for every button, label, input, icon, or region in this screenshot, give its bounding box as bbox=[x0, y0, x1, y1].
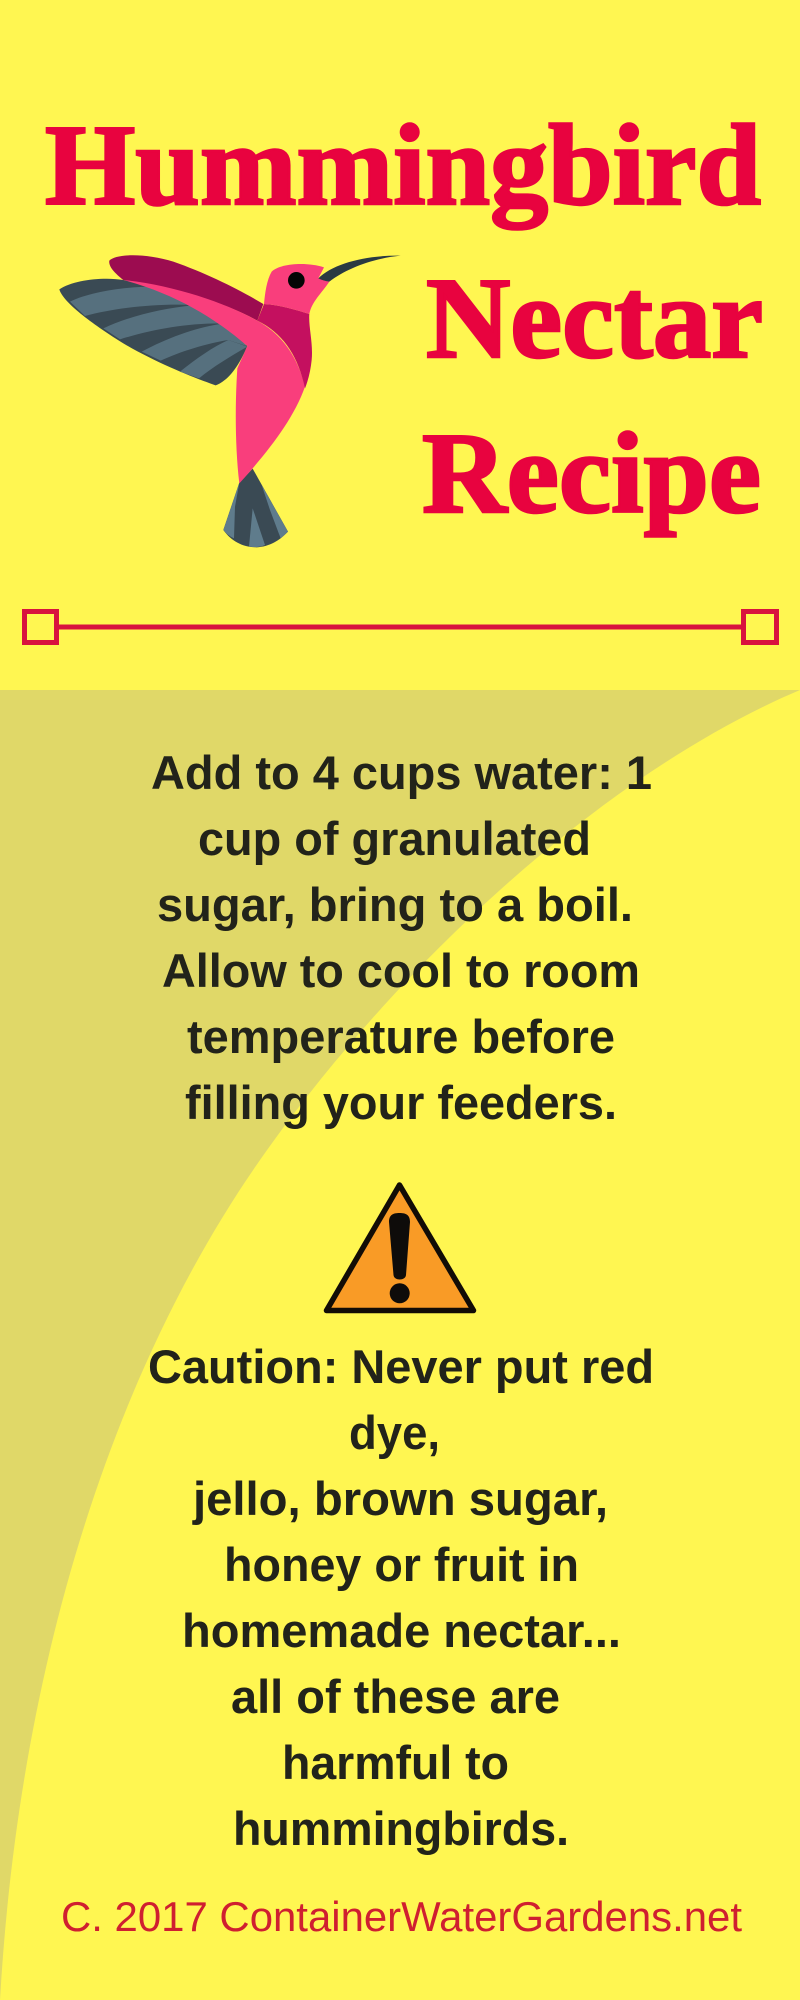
recipe text block: temperature before bbox=[187, 1010, 615, 1063]
recipe text block: Allow to cool to room bbox=[162, 944, 640, 997]
recipe text block: sugar, bring to a boil. bbox=[157, 878, 633, 931]
title line: Nectar: Nectar bbox=[426, 255, 763, 383]
recipe text block bbox=[151, 746, 652, 1129]
tail bbox=[223, 469, 288, 547]
caution text block: dye, bbox=[349, 1406, 440, 1459]
caution text block: hummingbirds. bbox=[233, 1802, 569, 1855]
chest bbox=[257, 304, 312, 388]
far wing bbox=[109, 255, 263, 321]
caution text block: homemade nectar... bbox=[182, 1604, 621, 1657]
beak bbox=[318, 256, 401, 282]
footer credit: C. 2017 ContainerWaterGardens.net bbox=[61, 1893, 742, 1940]
icon: warning triangle bbox=[326, 1185, 474, 1310]
divider with end squares bbox=[24, 612, 776, 642]
background curved olive panel bbox=[0, 690, 800, 2000]
caution text block: Caution: Never put red bbox=[148, 1340, 654, 1393]
caution text block: honey or fruit in bbox=[224, 1538, 579, 1591]
recipe text block: cup of granulated bbox=[198, 812, 591, 865]
caution text block bbox=[148, 1340, 654, 1855]
head bbox=[264, 264, 329, 314]
caution text block: harmful to bbox=[282, 1736, 509, 1789]
body bbox=[123, 280, 305, 483]
recipe text block: filling your feeders. bbox=[185, 1076, 617, 1129]
recipe text block: Add to 4 cups water: 1 bbox=[151, 746, 652, 799]
icon: hummingbird bbox=[59, 255, 401, 547]
title line: Hummingbird: Hummingbird bbox=[45, 102, 761, 230]
title line: Recipe: Recipe bbox=[422, 410, 761, 538]
caution text block: all of these are bbox=[231, 1670, 560, 1723]
eye bbox=[288, 272, 305, 289]
caution text block: jello, brown sugar, bbox=[192, 1472, 608, 1525]
near wing feathers bbox=[59, 279, 247, 385]
title bbox=[45, 102, 763, 538]
